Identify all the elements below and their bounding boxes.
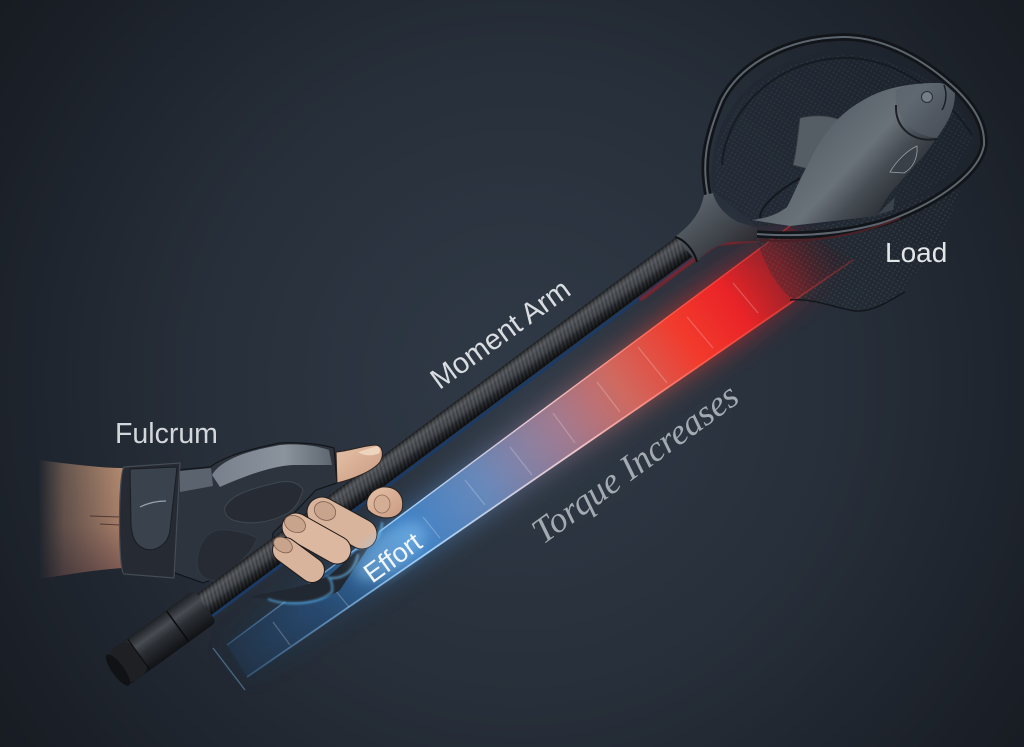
- glove: [172, 443, 337, 583]
- fingers: [271, 487, 403, 570]
- effort glow: [344, 511, 436, 593]
- net hoop rim: [705, 37, 984, 241]
- knuckle pad: [225, 481, 303, 523]
- red reflection under yoke: [640, 240, 757, 300]
- mouth: [942, 85, 946, 110]
- label: Moment Arm: Moment Arm: [425, 273, 577, 396]
- eye: [922, 92, 932, 102]
- torque gradient band: [213, 226, 853, 690]
- rod shadow line: [211, 256, 697, 617]
- label: Load: Load: [885, 237, 947, 268]
- head shading: [896, 83, 955, 138]
- net hoop interior: [711, 50, 977, 226]
- gill: [896, 105, 937, 140]
- belly fin: [877, 197, 895, 215]
- label: Torque Increases: Torque Increases: [524, 375, 746, 551]
- wrist strap: [120, 463, 180, 578]
- pectoral fin: [890, 146, 917, 173]
- label: Effort: Effort: [358, 526, 428, 589]
- yoke connector: [675, 193, 757, 262]
- glove body: [172, 443, 337, 583]
- fish: [752, 83, 955, 226]
- net bag below rim: [757, 187, 960, 311]
- carbon fiber rod: [195, 231, 699, 616]
- label: Fulcrum: Fulcrum: [115, 418, 218, 450]
- fish body: [752, 83, 955, 226]
- grip handle: [101, 590, 217, 689]
- dorsal fin: [793, 116, 838, 170]
- glove grey back: [212, 444, 332, 487]
- palm pad: [197, 530, 257, 580]
- tail loop: [760, 178, 800, 218]
- thumb: [336, 445, 382, 483]
- inner net ring: [722, 58, 972, 165]
- lower glove with blue glow: [250, 522, 382, 603]
- arm: [38, 460, 124, 579]
